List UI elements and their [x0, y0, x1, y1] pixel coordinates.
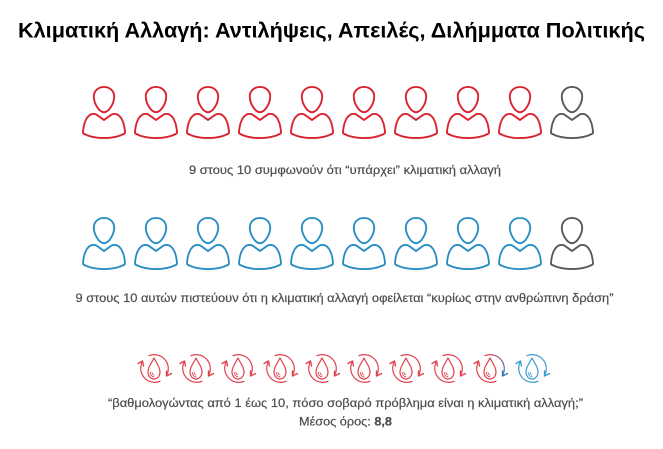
title: Κλιματική Αλλαγή: Αντιλήψεις, Απειλές, Διλήμματα Πολιτικής [18, 20, 645, 42]
caption: severity question and average: Μέσος όρος: 8,8 [299, 414, 392, 428]
caption: severity question and average: “βαθμολογώντας από 1 έως 10, πόσο σοβαρό πρόβλημα είναι η κλιματική αλλαγή;” [108, 396, 583, 410]
row of water drop cycle icons: severity score 8.8 of 10 [138, 355, 550, 382]
caption: severity question and average [108, 396, 583, 428]
caption: 9 of 10 believe human action: 9 στους 10 αυτών πιστεύουν ότι η κλιματική αλλαγή οφείλεται “κυρίως στην ανθρώπινη δράση” [76, 291, 614, 305]
row of people: agree climate change exists [83, 87, 593, 138]
caption: 9 of 10 agree: 9 στους 10 συμφωνούν ότι “υπάρχει” κλιματική αλλαγή [189, 163, 501, 177]
row of people: believe it is human caused [83, 218, 593, 269]
